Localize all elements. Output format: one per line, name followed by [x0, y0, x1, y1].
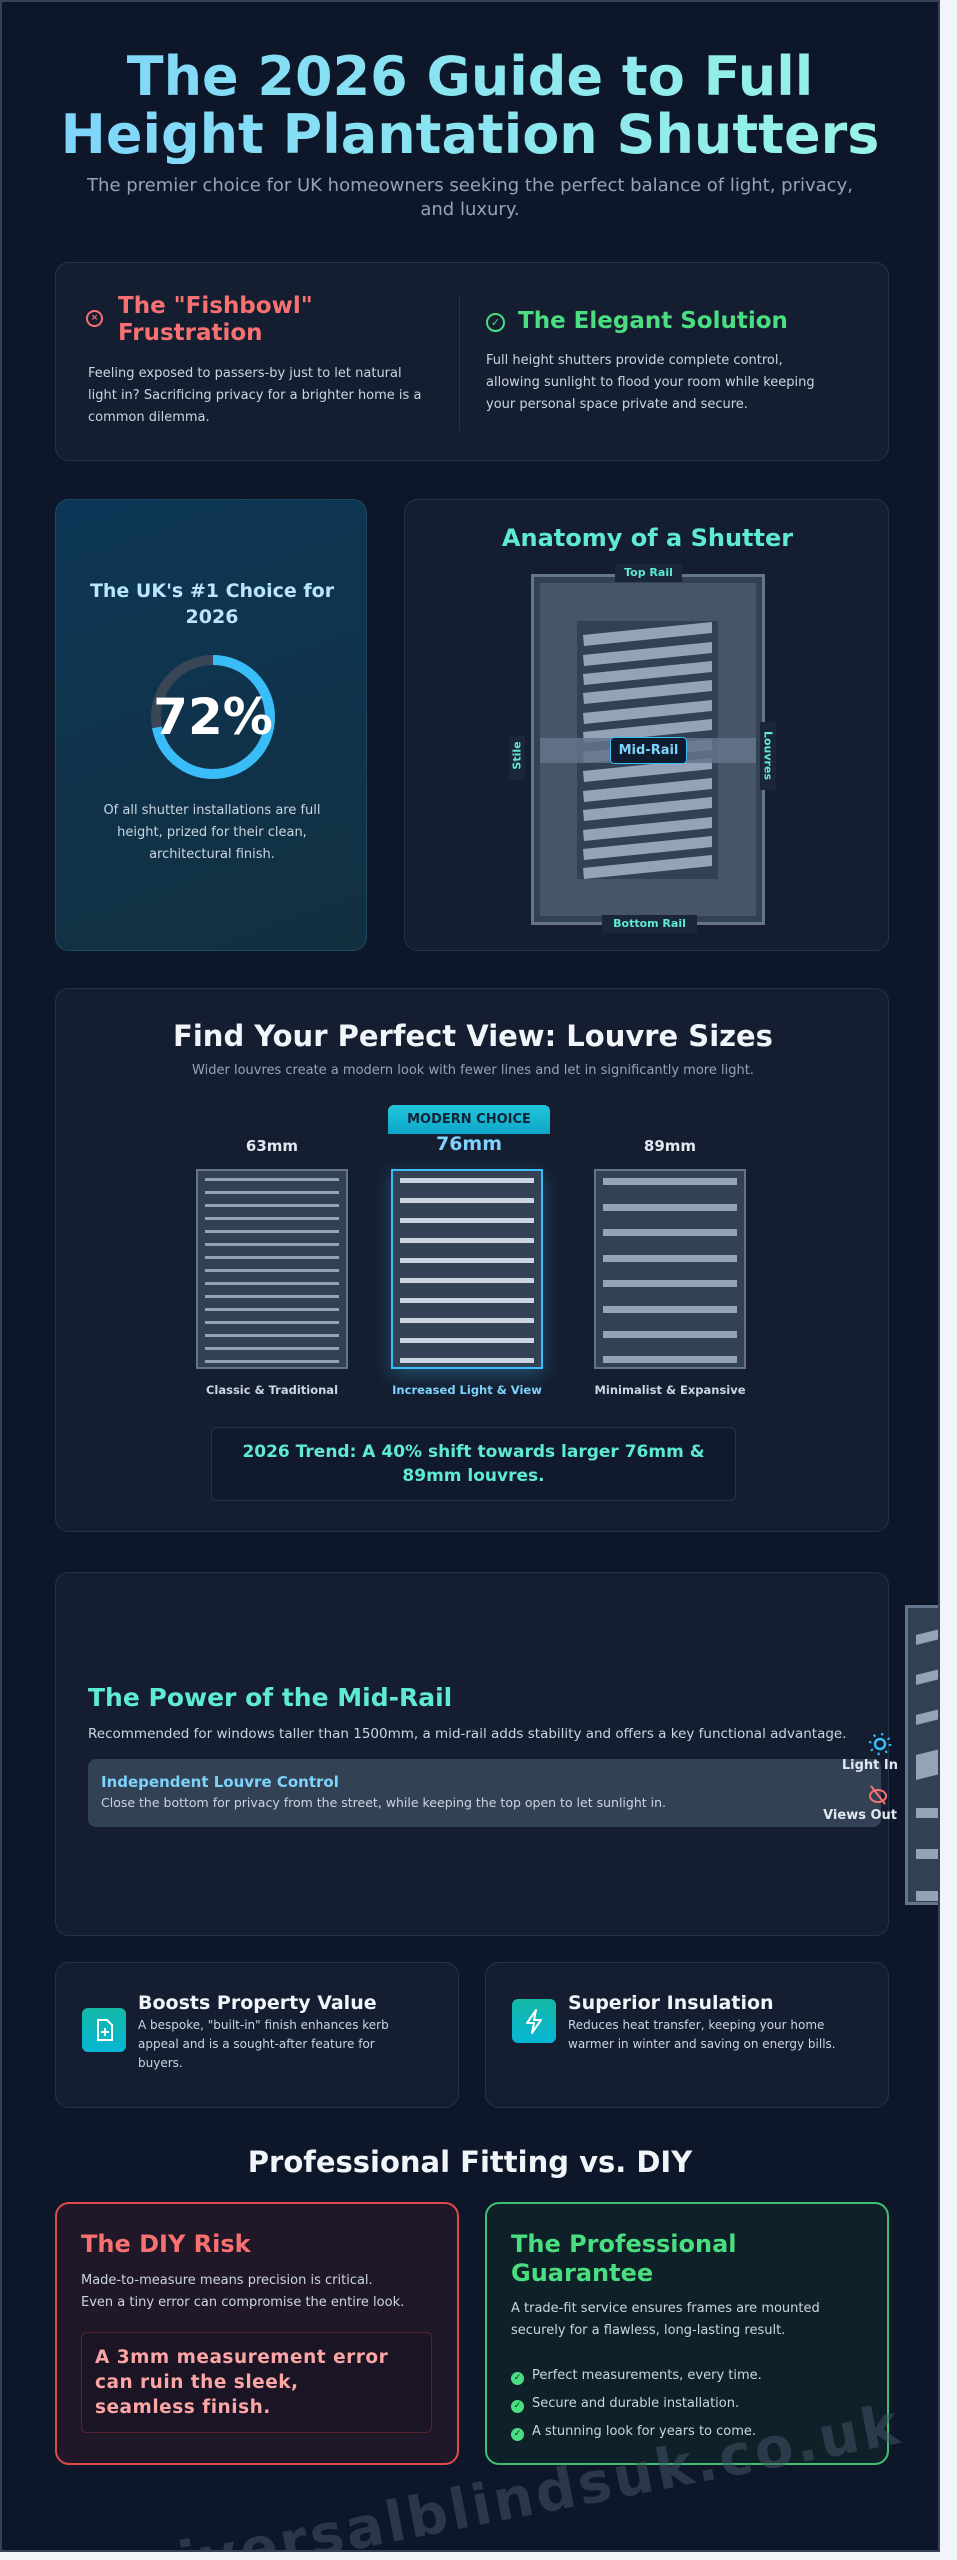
DIY text: [81, 2273, 404, 2310]
problem text: Feeling exposed to passers-by just to let natural light in? Sacrificing privacy for a brighter home is a common dilemma.: [88, 366, 421, 425]
option: 63mm: Classic & Traditional: [206, 1383, 338, 1397]
title: The 2026 Guide to Full: [127, 45, 813, 108]
panel: superior insulation: [485, 1962, 889, 2108]
solution text: your personal space private and secure.: [486, 397, 748, 412]
solution text: Full height shutters provide complete control,: [486, 353, 783, 368]
title: Height Plantation Shutters: [61, 103, 879, 166]
shutter diagram: [531, 574, 765, 925]
panel: anatomy: [404, 499, 889, 951]
trend callout: 2026 Trend: A 40% shift towards larger 76mm & 89mm louvres.: [242, 1442, 705, 1486]
option: 76mm modern choice: 76mm: [436, 1133, 502, 1155]
pro heading: The Professional Guarantee: [511, 2230, 737, 2287]
anatomy heading: Anatomy of a Shutter: [502, 524, 793, 552]
panel: louvre sizes: [55, 988, 889, 1532]
pro text: A trade-fit service ensures frames are mounted securely for a flawless, long-lasting result.: [511, 2301, 820, 2338]
solution heading: The Elegant Solution: [518, 308, 788, 334]
pro checklist: Perfect measurements, every time.: [532, 2368, 762, 2383]
DIY callout: [81, 2332, 432, 2433]
solution text: [486, 353, 815, 412]
DIY callout: A 3mm measurement error can ruin the sleek, seamless finish.: [95, 2347, 388, 2418]
value text: A bespoke, "built-in" finish enhances kerb appeal and is a sought-after feature for buyers.: [138, 2018, 389, 2070]
problem heading: ×: [91, 313, 98, 323]
louvre heading: Find Your Perfect View: Louvre Sizes: [173, 1019, 773, 1053]
independent control box: Close the bottom for privacy from the street, while keeping the top open to let sunlight in.: [101, 1795, 666, 1810]
label: louvres: Louvres: [762, 731, 774, 780]
icon: eye-off / views out: Views Out: [823, 1808, 897, 1823]
badge: modern choice: MODERN CHOICE: [407, 1112, 531, 1127]
label: louvres: [760, 722, 776, 790]
pro checklist: ✓: [514, 2429, 521, 2439]
icon: lightning: [512, 1999, 556, 2043]
label: top rail: [615, 564, 682, 582]
DIY text: Even a tiny error can compromise the entire look.: [81, 2295, 404, 2310]
pro checklist: A stunning look for years to come.: [532, 2424, 756, 2439]
option: 76mm modern choice: [382, 1105, 552, 1397]
subtitle: [86, 175, 853, 220]
option: 89mm: 89mm: [644, 1137, 696, 1155]
insulation text: Superior Insulation: [568, 1992, 774, 2014]
label: mid-rail: [610, 737, 687, 764]
heading: professional vs DIY: Professional Fitting vs. DIY: [248, 2145, 692, 2179]
pro checklist: ✓: [514, 2373, 521, 2383]
subtitle: and luxury.: [420, 199, 520, 220]
icon: eye-off / views out: [823, 1785, 897, 1823]
icon: sun / light in: [842, 1732, 898, 1773]
donut chart: [151, 655, 275, 779]
icon: sun / light in: Light In: [842, 1758, 898, 1773]
louvre subtitle: Wider louvres create a modern look with fewer lines and let in significantly more light.: [192, 1063, 754, 1078]
label: mid-rail: Mid-Rail: [619, 743, 678, 758]
pro checklist: ✓: [514, 2401, 521, 2411]
pro checklist: [511, 2368, 762, 2441]
solution text: allowing sunlight to flood your room while keeping: [486, 375, 815, 390]
DIY heading: The DIY Risk: [81, 2230, 251, 2258]
label: stile: Stile: [510, 741, 524, 770]
option: 76mm modern choice: Increased Light & View: [392, 1383, 542, 1397]
option: 63mm: [196, 1137, 348, 1397]
side shutter graphic: [905, 1605, 957, 1905]
option: 89mm: [594, 1137, 746, 1397]
subtitle: The premier choice for UK homeowners seeking the perfect balance of light, privacy,: [87, 175, 853, 196]
pro checklist: Secure and durable installation.: [532, 2396, 739, 2411]
label: bottom rail: Bottom Rail: [613, 917, 686, 930]
panel: mid-rail: [55, 1572, 889, 1936]
title: [2, 48, 938, 164]
badge: modern choice: [388, 1105, 550, 1134]
solution heading: ✓: [491, 316, 500, 329]
stat caption: Of all shutter installations are full height, prized for their clean, architectural finish.: [103, 803, 321, 862]
panel: professional guarantee: [485, 2202, 889, 2465]
insulation text: Reduces heat transfer, keeping your home warmer in winter and saving on energy bills.: [568, 2018, 836, 2051]
DIY text: Made-to-measure means precision is critical.: [81, 2273, 373, 2288]
problem heading: The "Fishbowl" Frustration: [118, 293, 313, 346]
mid-rail heading: The Power of the Mid-Rail: [88, 1683, 452, 1712]
independent control box: [88, 1759, 881, 1827]
donut chart: 72%: [153, 688, 273, 746]
panel: stat 72%: [55, 499, 367, 951]
label: top rail: Top Rail: [624, 566, 673, 579]
value text: Boosts Property Value: [138, 1992, 377, 2014]
trend callout: [211, 1427, 736, 1501]
value text: [138, 1992, 389, 2070]
independent control box: Independent Louvre Control: [101, 1773, 339, 1791]
option: 89mm: Minimalist & Expansive: [594, 1383, 746, 1397]
stat heading: The UK's #1 Choice for 2026: [90, 580, 334, 628]
panel: problem / solution: [55, 262, 889, 461]
label: bottom rail: [602, 915, 697, 933]
insulation text: [568, 1992, 836, 2051]
panel: boosts property value: [55, 1962, 459, 2108]
label: stile: [509, 736, 525, 780]
mid-rail text: Recommended for windows taller than 1500mm, a mid-rail adds stability and offers a key functional advantage.: [88, 1726, 847, 1742]
option: 63mm: 63mm: [246, 1137, 298, 1155]
panel: DIY risk: [55, 2202, 459, 2465]
icon: document plus: [82, 2008, 126, 2052]
